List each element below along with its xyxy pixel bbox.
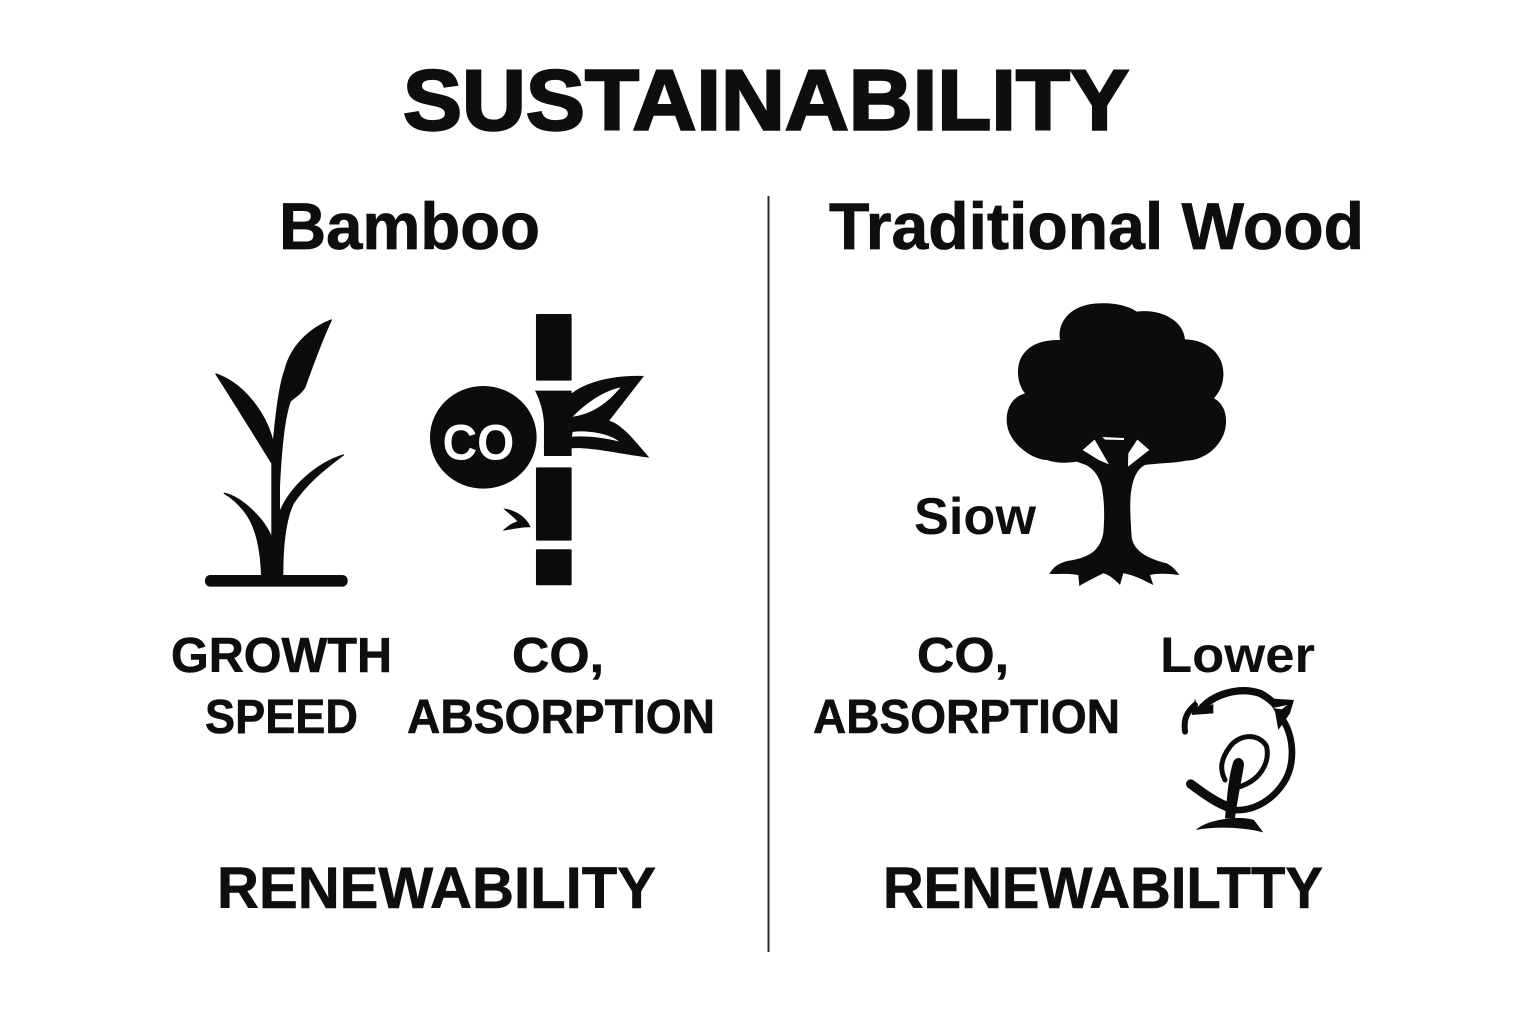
label: CO2 absorption: CO, — [917, 629, 1009, 683]
icon: tree — [1007, 303, 1226, 586]
label: CO2 absorption — [407, 629, 715, 744]
label: growth speed: SPEED — [205, 691, 358, 744]
heading: traditional wood: Traditional Wood — [829, 189, 1364, 263]
label: slow: Siow — [914, 488, 1037, 546]
label: CO2 absorption — [813, 629, 1120, 744]
icon: growing plant — [205, 320, 348, 587]
panel: traditional wood — [813, 189, 1364, 921]
label: renewability: RENEWABILITY — [217, 856, 656, 921]
icon: bamboo stalk with CO2 circle — [430, 314, 649, 585]
panel: bamboo — [171, 189, 715, 921]
label: CO2 absorption: CO, — [512, 629, 604, 683]
title: SUSTAINABILITY — [403, 54, 1129, 148]
label: CO2 absorption: ABSORPTION — [407, 691, 715, 744]
icon: bamboo stalk with CO2 circle: CO — [443, 414, 514, 470]
heading: bamboo: Bamboo — [279, 189, 540, 263]
label: renewability: RENEWABILTTY — [883, 856, 1323, 921]
center divider — [768, 196, 770, 952]
label: CO2 absorption: ABSORPTION — [813, 691, 1120, 744]
label: growth speed: GROWTH — [171, 629, 392, 683]
icon: renewal cycle with sprout — [1185, 691, 1294, 832]
label: lower: Lower — [1160, 627, 1315, 683]
label: growth speed — [171, 629, 392, 744]
